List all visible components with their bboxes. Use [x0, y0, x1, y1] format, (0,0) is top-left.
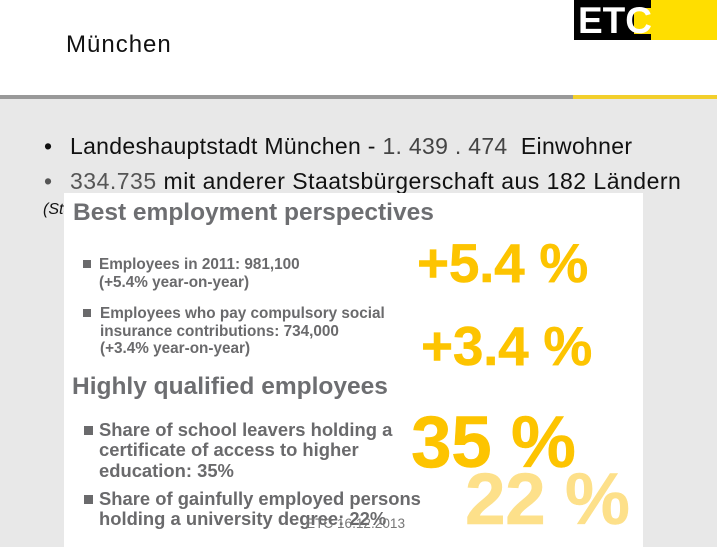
bullet text: school leavers: education: 35%: [99, 460, 234, 481]
bullet list: 334.735 mit anderer Staatsbürgerschaft aus 182 Ländern: [70, 168, 681, 194]
bullet: population: [44, 133, 632, 159]
bullet text: employees in 2011: [83, 256, 300, 290]
stat: +3.4 %: +3.4 %: [421, 315, 592, 377]
footer date: ETC 16.12.2013: [306, 516, 405, 531]
bullet text: social insurance: Employees who pay compulsory social: [100, 305, 385, 322]
logo: ETC: [574, 0, 717, 40]
bullet list: •: [44, 168, 53, 194]
bullet text: school leavers: [84, 419, 392, 481]
bullet text: social insurance: insurance contributions: 734,000: [100, 322, 339, 340]
bullet: foreign citizens: [44, 168, 681, 194]
bullet text: social insurance: (+3.4% year-on-year): [100, 340, 250, 357]
bullet list: Landeshauptstadt München - 1. 439 . 474 Einwohner: [70, 133, 632, 159]
panel: employment image: [64, 193, 643, 547]
bullet text: employees in 2011: Employees in 2011: 981,100: [99, 256, 300, 273]
bullet list: [44, 133, 681, 194]
bullet text: employees in 2011: (+5.4% year-on-year): [99, 274, 249, 290]
heading: best employment perspectives: Best employment perspectives: [73, 199, 434, 226]
header rule: [0, 95, 717, 99]
bullet text: university degree: [84, 488, 421, 529]
stat: 22 %: 22 %: [465, 459, 629, 540]
bullet text: school leavers: Share of school leavers holding a: [99, 419, 392, 440]
heading: highly qualified employees: Highly qualified employees: [72, 373, 388, 400]
stat: 35 %: 35 %: [411, 402, 575, 483]
title: München: [66, 31, 172, 58]
header band: [0, 0, 717, 95]
source note (cut off): (Stand: [43, 201, 90, 218]
bullet text: social insurance: [83, 305, 385, 357]
bullet text: university degree: holding a university degree: 22%: [99, 508, 386, 529]
bullet list: •: [44, 133, 52, 159]
stat: +5.4 %: +5.4 %: [417, 232, 588, 294]
bullet text: university degree: Share of gainfully employed persons: [99, 488, 421, 509]
bullet text: school leavers: certificate of access to higher: [99, 439, 359, 460]
